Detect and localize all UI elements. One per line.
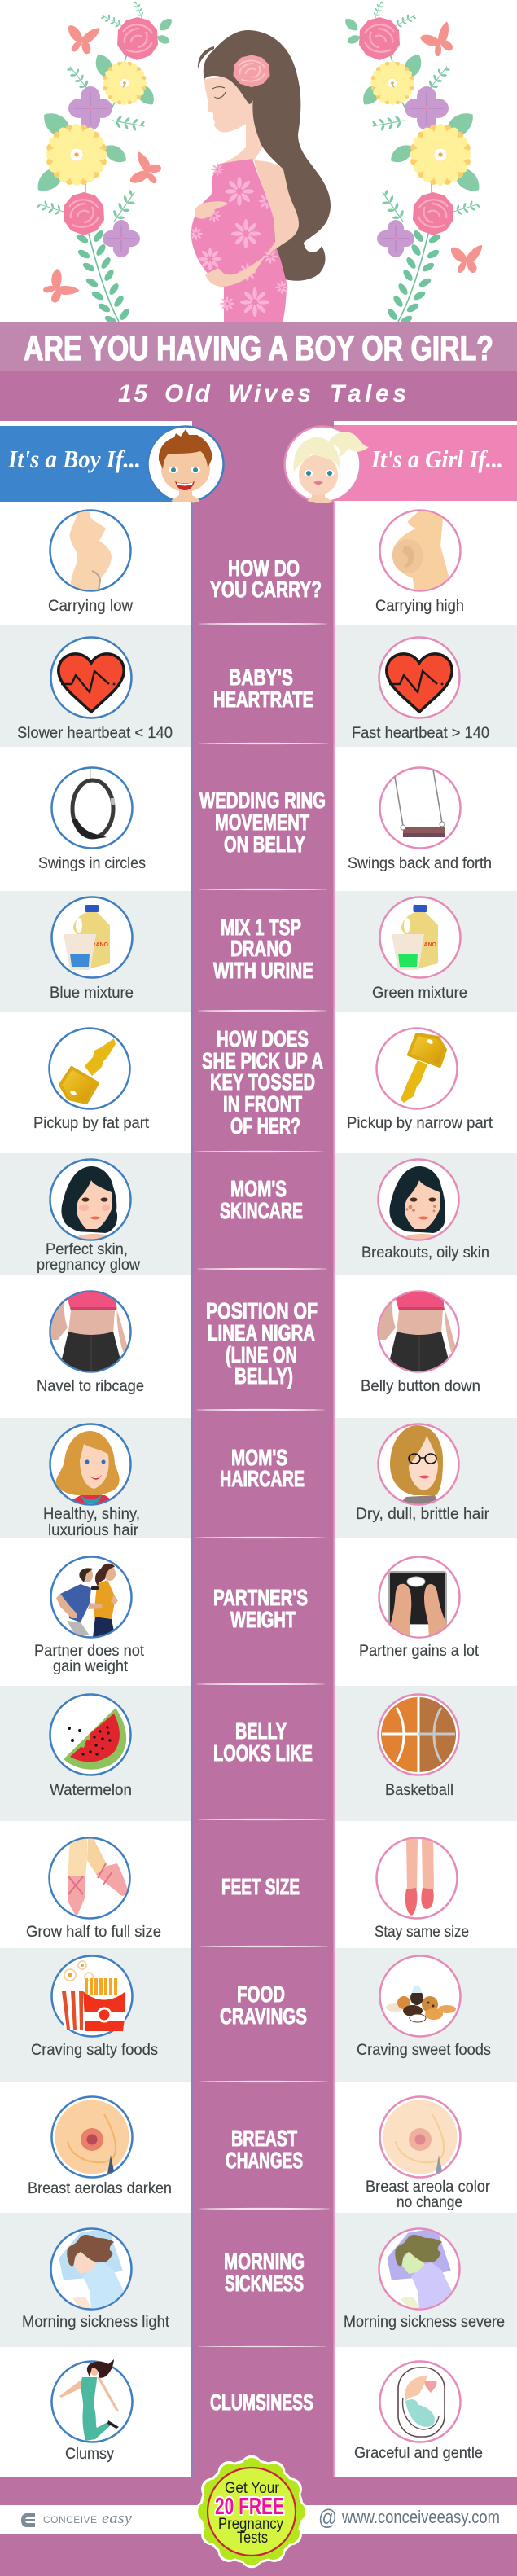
label: Slower heartbeat < 140 <box>17 725 173 742</box>
heading <box>213 915 313 983</box>
heading: DRANO <box>230 936 291 961</box>
heading <box>224 2249 305 2296</box>
icon: navel to ribcage <box>46 1291 130 1372</box>
row 15: clumsiness <box>0 2347 517 2477</box>
heading: BELLY <box>235 1718 287 1744</box>
row 3: wedding ring <box>0 747 517 891</box>
heading <box>202 1026 323 1139</box>
label <box>37 1241 140 1274</box>
label: Morning sickness light <box>22 2314 170 2331</box>
label: Craving salty foods <box>31 2042 158 2059</box>
row 11: feet size <box>26 1837 469 1940</box>
label: Breakouts, oily skin <box>361 1244 489 1262</box>
label: luxurious hair <box>48 1522 139 1539</box>
heading: WITH URINE <box>213 958 313 983</box>
label: Breast aerolas darken <box>28 2180 172 2197</box>
heading: KEY TOSSED <box>210 1069 315 1095</box>
center column background <box>192 421 334 2478</box>
header: it's a boy if <box>0 426 223 503</box>
label: gain weight <box>53 1658 129 1675</box>
heading <box>220 1176 303 1223</box>
label <box>34 1643 145 1675</box>
icon: carrying high <box>379 510 461 593</box>
heading: LINEA NIGRA <box>208 1320 315 1345</box>
label: Morning sickness severe <box>344 2314 505 2331</box>
icon: same size feet <box>376 1837 458 1919</box>
label: Partner gains a lot <box>359 1643 480 1660</box>
label: Dry, dull, brittle hair <box>356 1506 490 1523</box>
subtitle band: 15 <box>118 380 148 407</box>
label: Carrying low <box>48 598 133 615</box>
label: Belly button down <box>361 1378 480 1395</box>
row 8: mom's haircare <box>0 1418 517 1539</box>
butterflies <box>38 22 482 309</box>
heading <box>213 1585 308 1632</box>
badge: 20 free pregnancy tests: Tests <box>237 2530 268 2547</box>
heading <box>226 2126 303 2173</box>
heading: CHANGES <box>226 2148 303 2173</box>
icon: drano blue <box>52 897 132 977</box>
icon: breakouts <box>378 1160 459 1242</box>
panel: hero illustration <box>0 0 517 326</box>
badge: 20 free pregnancy tests: Get Your <box>225 2480 280 2497</box>
badge: 20 free pregnancy tests: Pregnancy <box>218 2516 283 2533</box>
icon: ring <box>52 767 132 849</box>
heading: (LINE ON <box>226 1342 297 1367</box>
heading: CRAVINGS <box>220 2003 307 2029</box>
row 5: key <box>0 1012 517 1153</box>
heading: PARTNER'S <box>213 1585 308 1610</box>
icon: key fat part <box>49 1028 130 1109</box>
badge: 20 free pregnancy tests: 20 FREE <box>215 2494 284 2520</box>
label: Perfect skin, <box>46 1241 128 1258</box>
icon: graceful <box>379 2362 461 2442</box>
heading: MOM'S <box>230 1176 287 1201</box>
label: Green mixture <box>372 985 467 1002</box>
row 6: mom's skincare <box>0 1153 517 1275</box>
icon: girl avatar <box>285 427 360 503</box>
icon: heart fast <box>379 637 459 718</box>
heading: BELLY) <box>234 1363 293 1389</box>
heading: HEARTRATE <box>213 687 313 712</box>
row 7: linea nigra <box>37 1290 480 1394</box>
icon: ponytail <box>330 432 369 456</box>
subtitle band <box>0 371 517 421</box>
icon: sickness light <box>50 2228 132 2310</box>
label: Swings in circles <box>38 855 146 872</box>
heading <box>213 665 313 712</box>
label: Swings back and forth <box>348 855 492 872</box>
heading: FOOD <box>237 1981 285 2007</box>
heading: CLUMSINESS <box>210 2389 313 2415</box>
pregnant woman <box>190 30 331 322</box>
label: Pickup by narrow part <box>347 1115 493 1132</box>
icon: scale <box>379 1557 459 1639</box>
panel: footer <box>0 2455 517 2576</box>
icon: areola no change <box>379 2096 461 2178</box>
label: Pickup by fat part <box>33 1115 150 1132</box>
icon: sickness severe <box>379 2228 459 2310</box>
row 4: drano <box>0 891 517 1012</box>
logo: conceive easy <box>21 2510 133 2527</box>
heading <box>213 1718 313 1766</box>
row 13: breast changes <box>0 2082 517 2213</box>
icon: luxurious hair <box>50 1424 130 1505</box>
heading <box>210 555 322 602</box>
icon: key narrow part <box>376 1028 458 1109</box>
center column side lines <box>191 502 335 2477</box>
website: @ <box>318 2505 337 2530</box>
label: Grow half to full size <box>26 1924 161 1941</box>
heading <box>220 1445 305 1491</box>
logo: conceive easy: CONCEIVE <box>43 2514 97 2526</box>
label: Healthy, shiny, <box>43 1506 140 1523</box>
heading: HOW DO <box>228 555 300 581</box>
label: Blue mixture <box>50 985 134 1002</box>
row 12: food cravings <box>0 1948 517 2082</box>
logo: conceive easy: easy <box>102 2510 133 2527</box>
icon: sweet foods <box>379 1956 461 2036</box>
label: Watermelon <box>50 1782 132 1799</box>
heading: WEDDING RING <box>199 788 326 813</box>
icon: watermelon <box>50 1694 130 1775</box>
flowers right <box>343 0 485 326</box>
label: Fast heartbeat > 140 <box>352 725 489 742</box>
row 14: morning sickness <box>0 2213 517 2347</box>
icon: boy avatar <box>148 427 223 503</box>
icon: clumsy <box>52 2359 132 2442</box>
icon: ballet feet <box>49 1837 130 1919</box>
heading: SKINCARE <box>220 1198 303 1223</box>
header: it's a boy if: It's a Boy If... <box>7 445 141 473</box>
label: Clumsy <box>65 2446 114 2463</box>
heading: BREAST <box>231 2126 297 2151</box>
header: it's a girl if: It's a Girl If... <box>370 445 503 473</box>
row 2: baby's heartrate <box>0 625 517 747</box>
icon: basketball <box>378 1694 459 1775</box>
heading: HAIRCARE <box>220 1466 305 1491</box>
icon: swing <box>379 767 461 849</box>
heading: YOU CARRY? <box>210 577 322 602</box>
row 9: partner's weight <box>35 1556 479 1674</box>
badge: 20 free pregnancy tests <box>195 2455 308 2568</box>
label: Navel to ribcage <box>37 1378 144 1395</box>
heading: SICKNESS <box>225 2271 304 2296</box>
label: Graceful and gentle <box>354 2445 483 2462</box>
label: Craving sweet foods <box>357 2042 491 2059</box>
subtitle band: Old <box>164 380 211 407</box>
label: Basketball <box>385 1782 453 1799</box>
heading: OF HER? <box>230 1113 300 1139</box>
icon: perfect skin <box>50 1160 130 1242</box>
heading: LOOKS LIKE <box>213 1740 313 1766</box>
label: Partner does not <box>34 1643 145 1660</box>
heading: MOVEMENT <box>215 810 309 835</box>
heading: MORNING <box>224 2249 305 2274</box>
label <box>366 2179 491 2211</box>
icon: salty foods <box>52 1956 132 2036</box>
heading: MIX 1 TSP <box>221 915 301 940</box>
heading: ON BELLY <box>224 832 305 857</box>
heading: HOW DOES <box>217 1026 309 1051</box>
flowers left <box>32 0 174 326</box>
header: it's a girl if <box>285 425 517 503</box>
website <box>318 2505 500 2530</box>
label: Breast areola color <box>366 2179 491 2196</box>
heading: FEET SIZE <box>221 1874 300 1899</box>
heading: BABY'S <box>229 665 293 690</box>
heading <box>199 788 326 857</box>
label <box>43 1506 140 1539</box>
icon: belly button down <box>374 1291 459 1372</box>
row 1: how do you carry <box>49 502 463 614</box>
heading: WEIGHT <box>230 1607 296 1632</box>
subtitle band: Tales <box>330 380 406 407</box>
heading: MOM'S <box>231 1445 287 1470</box>
icon: areola dark <box>52 2096 132 2178</box>
label: pregnancy glow <box>37 1257 140 1274</box>
heading <box>206 1298 318 1389</box>
label: no change <box>397 2194 462 2211</box>
heading: POSITION OF <box>206 1298 318 1323</box>
heading <box>220 1981 307 2029</box>
row 10: belly looks like <box>0 1686 517 1821</box>
heading: SHE PICK UP A <box>202 1048 323 1073</box>
icon: drano green <box>379 897 461 977</box>
label: Stay same size <box>375 1924 469 1941</box>
icon: brittle hair <box>378 1424 459 1505</box>
row dividers <box>194 623 330 2347</box>
icon: carrying low <box>50 510 130 593</box>
icon: heart slow <box>50 637 132 718</box>
heading: IN FRONT <box>223 1091 302 1117</box>
subtitle band: Wives <box>228 380 311 407</box>
icon: runners <box>50 1557 132 1638</box>
label: Carrying high <box>375 598 464 615</box>
